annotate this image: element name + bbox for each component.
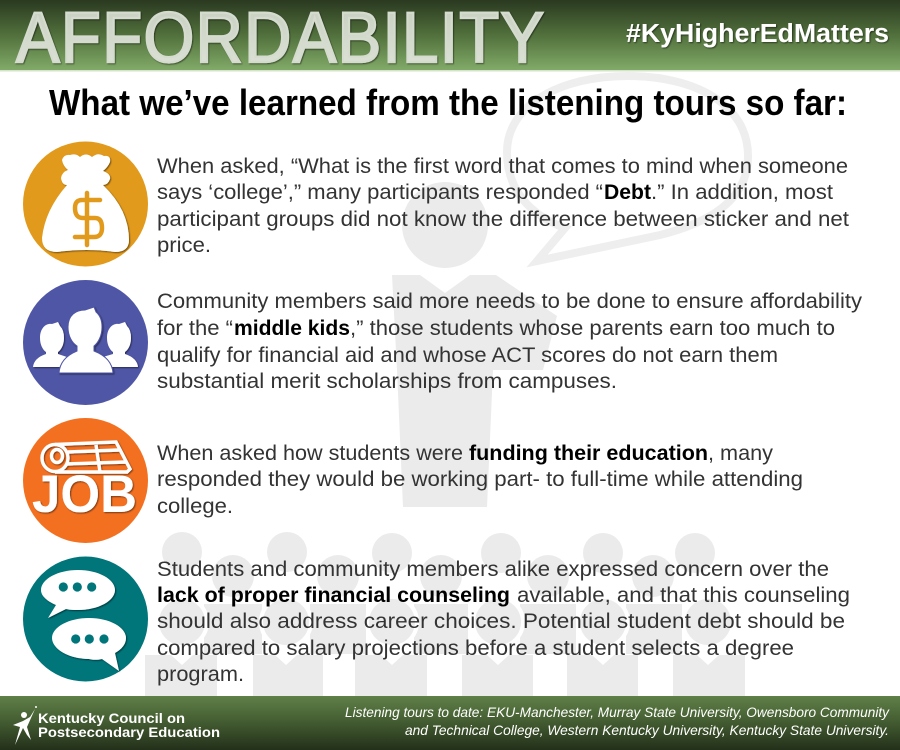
paragraph 3: When asked how students were — [157, 441, 463, 465]
logo: Kentucky Council on Postsecondary Education: Kentucky Council on — [38, 710, 185, 726]
footer note — [345, 704, 890, 738]
paragraph 2: ,” those students whose parents earn too much to — [350, 316, 835, 340]
paragraph 1: participant groups did not know the difference between sticker and net — [157, 207, 849, 231]
paragraph 3: college. — [157, 494, 233, 518]
paragraph 2: qualify for financial aid and whose ACT scores do not earn them — [157, 343, 778, 367]
paragraph 2: Community members said more needs to be done to ensure affordability — [157, 289, 862, 313]
paragraph 4: Students and community members alike expressed concern over the — [157, 557, 829, 581]
icon: group of people — [23, 280, 148, 405]
paragraph 4 — [157, 557, 850, 686]
icon: job newspaper — [23, 418, 148, 543]
paragraph 3: funding their education — [469, 441, 708, 465]
paragraph 1 — [157, 154, 849, 257]
paragraph 4: compared to salary projections before a student selects a degree — [157, 636, 794, 660]
paragraph 2: middle kids — [234, 316, 350, 340]
paragraph 4: program. — [157, 662, 244, 686]
icon: money bag — [23, 142, 148, 266]
panel: counseling — [23, 556, 850, 686]
panel: middle kids — [23, 280, 862, 405]
banner title: AFFORDABILITY — [16, 0, 544, 78]
background: crowd of figures — [145, 532, 745, 696]
panel: debt — [23, 142, 849, 266]
paragraph 3: , many — [708, 441, 773, 465]
hashtag: #KyHigherEdMatters — [626, 20, 889, 48]
paragraph 3 — [157, 441, 803, 518]
icon: speech bubbles — [23, 556, 148, 682]
logo: Kentucky Council on Postsecondary Education — [13, 706, 220, 745]
paragraph 4: should also address career choices. Potential student debt should be — [157, 609, 845, 633]
paragraph 1: Debt — [604, 180, 651, 204]
paragraph 2 — [157, 289, 862, 393]
paragraph 2: substantial merit scholarships from campuses. — [157, 369, 617, 393]
paragraph 1: .” In addition, most — [651, 180, 833, 204]
main heading: What we’ve learned from the listening tours so far: — [49, 82, 847, 123]
paragraph 1: When asked, “What is the first word that comes to mind when someone — [157, 154, 848, 178]
background: large figure — [392, 182, 557, 507]
footer note: and Technical College, Western Kentucky University, Kentucky State University. — [405, 722, 889, 738]
header banner — [0, 0, 900, 78]
footer banner — [0, 696, 900, 750]
paragraph 3: responded they would be working part- to full-time while attending — [157, 467, 803, 491]
background: speech bubble outline — [507, 76, 748, 261]
panel: funding — [23, 418, 803, 543]
paragraph 1: says ‘college’,” many participants responded “ — [157, 180, 603, 204]
paragraph 1: price. — [157, 233, 211, 257]
footer note: Listening tours to date: EKU-Manchester, Murray State University, Owensboro Community — [345, 704, 890, 720]
paragraph 4: lack of proper financial counseling — [157, 583, 510, 607]
logo: Kentucky Council on Postsecondary Education: Postsecondary Education — [38, 724, 220, 740]
paragraph 2: for the “ — [157, 316, 233, 340]
icon: job newspaper: JOB — [32, 465, 137, 524]
paragraph 4: available, and that this counseling — [517, 583, 850, 607]
